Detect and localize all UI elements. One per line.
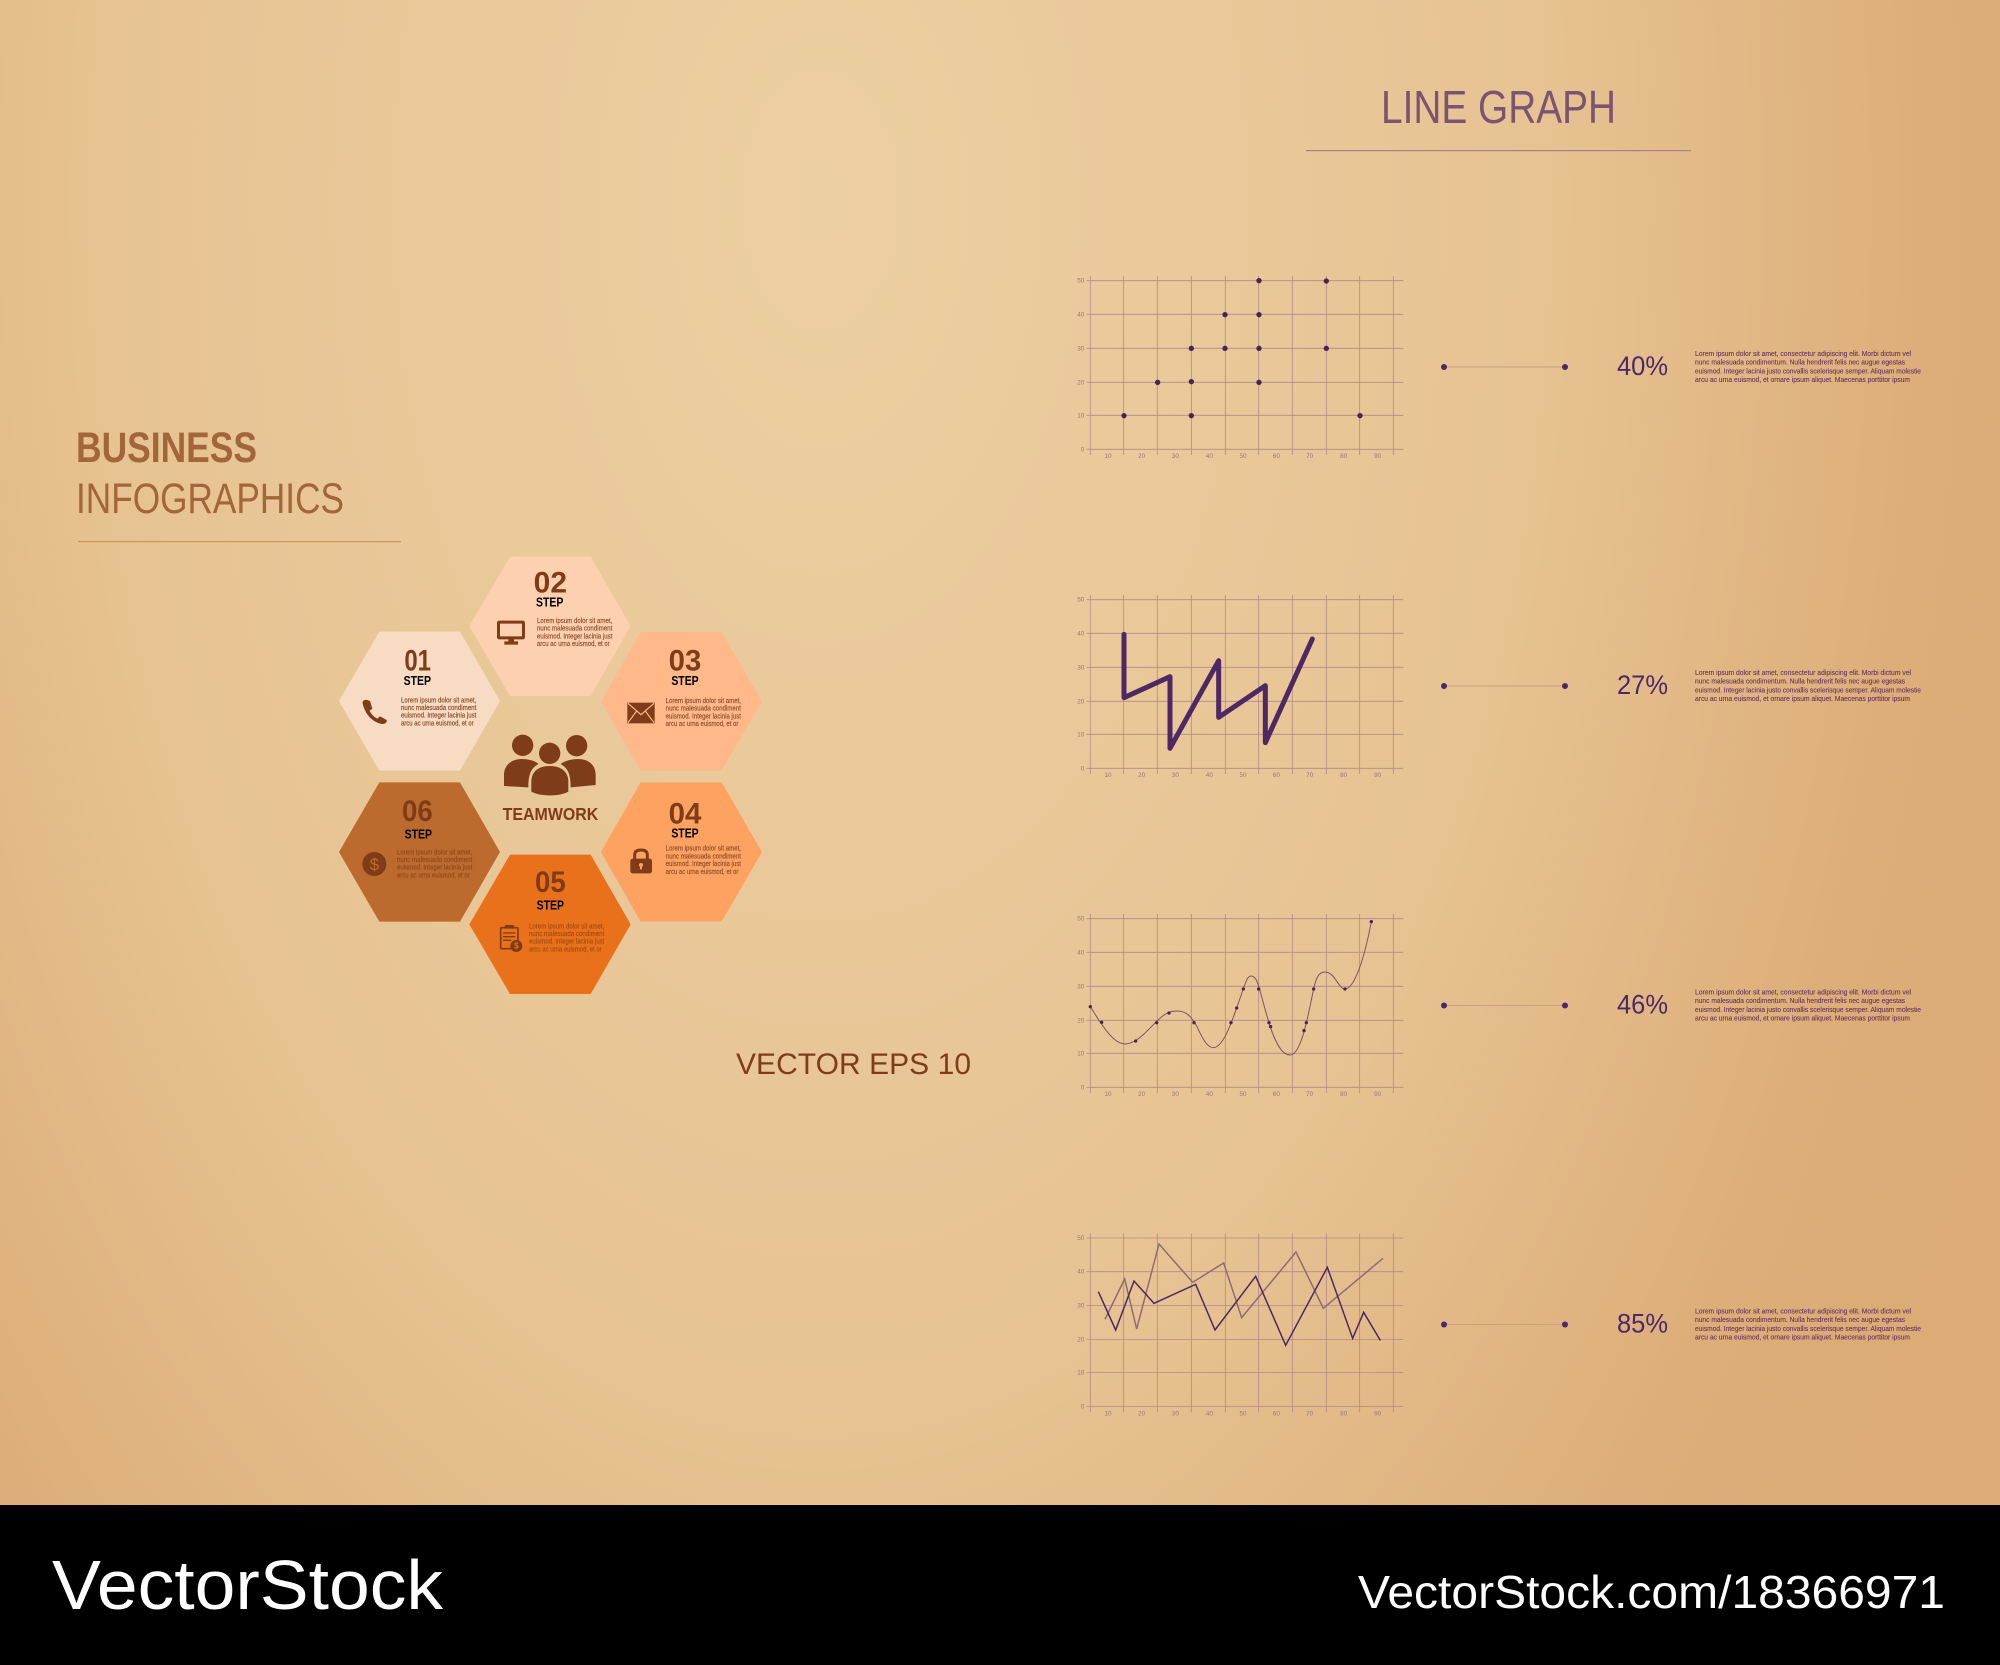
chart 3: smooth curve with points [1077,914,1403,1098]
chart 2: thick zigzag line: 60 [1273,772,1280,779]
chart 1: scatter dots: 50 [1077,278,1085,285]
row 2: connector, percent, text: 27% [1617,670,1668,700]
hexagon step 06: euismod. Integer lacinia just [397,865,472,872]
hexagon step 04: arcu ac urna euismod, et or [666,869,739,876]
hexagon step 02: Lorem ipsum dolor sit amet, [537,618,612,625]
row 3: connector, percent, text: nunc malesuada condimentum. Nulla hendrerit felis nec augue egestas [1695,996,1905,1005]
hexagon step 05: nunc malesuada condiment [529,931,604,938]
chart 1: scatter dots: 30 [1172,453,1179,460]
hexagon step 06: nunc malesuada condiment [397,857,472,864]
chart 4: two zigzag lines: 30 [1172,1410,1179,1417]
chart 4: two zigzag lines: 50 [1239,1410,1247,1417]
hexagon step 02: euismod. Integer lacinia just [537,633,612,640]
icon: padlock [630,850,652,873]
row 3: connector, percent, text: Lorem ipsum dolor sit amet, consectetur adipiscing elit. Morbi dictum vel [1695,988,1911,996]
chart 4: two zigzag lines: 10 [1077,1370,1085,1377]
chart 4: two zigzag lines: 0 [1081,1404,1085,1411]
chart 1: scatter dots: 10 [1077,412,1085,419]
hexagon step 01: euismod. Integer lacinia just [401,713,476,720]
hexagon step 03: euismod. Integer lacinia just [666,713,741,720]
chart 4: two zigzag lines [1077,1233,1403,1417]
heading: business infographics [76,424,401,542]
chart 2: thick zigzag line: 40 [1206,772,1213,779]
row 4: connector, percent, text: euismod. Integer lacinia justo convallis scelerisque semper. Aliquam molestie [1695,1324,1921,1333]
row 1: connector, percent, text [1441,349,1921,384]
chart 2: thick zigzag line: 50 [1239,772,1247,779]
heading: business infographics: BUSINESS [76,424,257,472]
chart 1: scatter dots: 30 [1077,345,1085,352]
hexagon step 05: euismod. Integer lacinia just [529,939,604,946]
chart 4: two zigzag lines: 10 [1104,1410,1112,1417]
row 4: connector, percent, text: 85% [1617,1308,1668,1338]
chart 4: two zigzag lines: 20 [1138,1410,1146,1417]
hexagon step 06: arcu ac urna euismod, et or [397,872,470,879]
chart 3: smooth curve with points: 30 [1077,983,1085,990]
chart 3: smooth curve with points: 30 [1172,1091,1179,1098]
hexagon step 05: 05 [535,866,566,899]
footer bar: VectorStock.com/18366971 [1358,1566,1945,1618]
chart 2: thick zigzag line: 70 [1306,772,1314,779]
row 1: connector, percent, text: 40% [1617,351,1668,381]
row 1: connector, percent, text: Lorem ipsum dolor sit amet, consectetur adipiscing elit. Morbi dictum vel [1695,349,1911,358]
hexagon step 05: arcu ac urna euismod, et or [529,947,602,954]
icon: clipboard with coin [501,925,522,952]
chart 3: smooth curve with points: 90 [1374,1091,1382,1098]
chart 1: scatter dots: 80 [1340,453,1348,460]
row 4: connector, percent, text: arcu ac urna euismod, et ornare ipsum aliquet. Maecenas porttitor ipsum [1695,1332,1910,1342]
row 4: connector, percent, text: nunc malesuada condimentum. Nulla hendrerit felis nec augue egestas [1695,1315,1905,1324]
hexagon step 05: STEP [537,898,564,913]
chart 4: two zigzag lines: 20 [1077,1337,1085,1344]
row 3: connector, percent, text [1441,988,1921,1022]
hexagon step 06 [339,782,500,922]
row 2: connector, percent, text: Lorem ipsum dolor sit amet, consectetur adipiscing elit. Morbi dictum vel [1695,668,1911,677]
chart 3: smooth curve with points: 10 [1104,1091,1112,1098]
chart 2: thick zigzag line [1077,595,1403,779]
chart 4: two zigzag lines: 40 [1206,1410,1213,1417]
hexagon step 03: nunc malesuada condiment [666,706,741,713]
chart 2: thick zigzag line: 30 [1077,664,1085,671]
chart 3: smooth curve with points: 80 [1340,1091,1348,1098]
row 2: connector, percent, text: arcu ac urna euismod, et ornare ipsum aliquet. Maecenas porttitor ipsum [1695,694,1910,703]
hexagon step 04: nunc malesuada condiment [666,853,741,860]
chart 4: two zigzag lines: 30 [1077,1303,1085,1310]
chart 2: thick zigzag line: 20 [1138,772,1146,779]
hexagon step 04: 04 [669,797,702,830]
chart 1: scatter dots: 70 [1306,453,1314,460]
hexagon step 01: arcu ac urna euismod, et or [401,720,474,727]
chart 4: two zigzag lines: 60 [1273,1410,1280,1417]
row 1: connector, percent, text: arcu ac urna euismod, et ornare ipsum aliquet. Maecenas porttitor ipsum [1695,375,1910,384]
chart 3: smooth curve with points: 60 [1273,1091,1280,1098]
row 1: connector, percent, text: euismod. Integer lacinia justo convallis scelerisque semper. Aliquam molestie [1695,366,1921,375]
row 2: connector, percent, text [1441,668,1921,703]
icon: clipboard with coin: $ [514,942,519,951]
row 4: connector, percent, text [1441,1306,1921,1342]
hexagon step 02: arcu ac urna euismod, et or [537,641,610,648]
icon: phone [363,700,387,724]
chart 1: scatter dots: 90 [1374,453,1382,460]
hexagon step 01: 01 [404,645,431,678]
chart 3: smooth curve with points: 50 [1239,1091,1247,1098]
icon: monitor [497,621,525,645]
chart 2: thick zigzag line: 80 [1340,772,1348,779]
chart 2: thick zigzag line: 90 [1374,772,1382,779]
chart 3: smooth curve with points: 40 [1206,1091,1213,1098]
row 4: connector, percent, text: Lorem ipsum dolor sit amet, consectetur adipiscing elit. Morbi dictum vel [1695,1306,1911,1316]
heading: line graph: LINE GRAPH [1381,81,1616,133]
row 2: connector, percent, text: nunc malesuada condimentum. Nulla hendrerit felis nec augue egestas [1695,677,1905,686]
hexagon step 06: 06 [402,795,433,828]
chart 1: scatter dots: 50 [1239,453,1247,460]
chart 4: two zigzag lines: 40 [1077,1269,1085,1276]
chart 3: smooth curve with points: 10 [1077,1050,1085,1057]
chart 2: thick zigzag line: 20 [1077,698,1085,705]
heading: business infographics: INFOGRAPHICS [76,475,344,523]
icon: envelope [627,703,655,723]
icon: dollar coin [362,852,386,876]
chart 1: scatter dots: 20 [1138,453,1146,460]
teamwork hexagon diagram [339,557,762,994]
label: teamwork: TEAMWORK [503,804,599,824]
chart 1: scatter dots: 20 [1077,379,1085,386]
hexagon step 03: arcu ac urna euismod, et or [666,721,739,728]
hexagon step 04: Lorem ipsum dolor sit amet, [666,846,741,853]
hexagon step 02: 02 [534,566,567,599]
hexagon step 03: 03 [669,645,701,678]
chart 3: smooth curve with points: 0 [1081,1084,1085,1091]
chart 1: scatter dots: 0 [1081,446,1085,453]
hexagon step 01: nunc malesuada condiment [401,705,476,712]
hexagon step 02 [469,557,631,696]
chart 3: smooth curve with points: 70 [1306,1091,1314,1098]
hexagon step 01: STEP [404,673,431,688]
hexagon step 03: STEP [671,673,699,688]
chart 3: smooth curve with points: 20 [1077,1017,1085,1024]
chart 2: thick zigzag line: 10 [1104,772,1112,779]
hexagon step 04: STEP [671,826,699,841]
chart 3: smooth curve with points: 50 [1077,916,1085,923]
hexagon step 04: euismod. Integer lacinia just [666,861,741,868]
chart 2: thick zigzag line: 10 [1077,731,1085,738]
chart 1: scatter dots: 10 [1104,453,1112,460]
hexagon step 03: Lorem ipsum dolor sit amet, [666,698,741,705]
hexagon step 02: STEP [536,595,563,610]
row 3: connector, percent, text: 46% [1617,990,1668,1020]
row 1: connector, percent, text: nunc malesuada condimentum. Nulla hendrerit felis nec augue egestas [1695,358,1905,367]
footer bar: VectorStock [52,1546,444,1624]
chart 1: scatter dots [1077,276,1403,460]
chart 2: thick zigzag line: 30 [1172,772,1179,779]
chart 2: thick zigzag line: 50 [1077,597,1085,604]
chart 4: two zigzag lines: 90 [1374,1410,1382,1417]
hexagon step 06: Lorem ipsum dolor sit amet, [397,849,472,856]
chart 2: thick zigzag line: 40 [1077,630,1085,637]
chart 4: two zigzag lines: 50 [1077,1235,1085,1242]
hexagon step 06: STEP [405,826,432,841]
chart 3: smooth curve with points: 40 [1077,949,1085,956]
icon: dollar coin: $ [370,855,379,874]
footer bar [0,1505,2000,1665]
chart 2: thick zigzag line: 0 [1081,765,1085,772]
chart 4: two zigzag lines: 80 [1340,1410,1348,1417]
hexagon step 03 [601,632,762,771]
hexagon step 01 [339,632,500,771]
hexagon step 02: nunc malesuada condiment [537,626,612,633]
chart 4: two zigzag lines: 70 [1306,1410,1314,1417]
hexagon step 01: Lorem ipsum dolor sit amet, [401,697,476,704]
row 3: connector, percent, text: euismod. Integer lacinia justo convallis scelerisque semper. Aliquam molestie [1695,1005,1921,1014]
row 3: connector, percent, text: arcu ac urna euismod, et ornare ipsum aliquet. Maecenas porttitor ipsum [1695,1014,1910,1022]
hexagon step 05 [469,855,631,994]
chart 3: smooth curve with points: 20 [1138,1091,1146,1098]
icon: team of people [504,735,596,795]
chart 1: scatter dots: 40 [1206,453,1213,460]
chart 1: scatter dots: 40 [1077,311,1085,318]
hexagon step 04 [601,782,762,922]
row 2: connector, percent, text: euismod. Integer lacinia justo convallis scelerisque semper. Aliquam molestie [1695,685,1921,694]
hexagon step 05: Lorem ipsum dolor sit amet, [529,923,604,930]
label: vector eps 10: VECTOR EPS 10 [736,1048,971,1081]
chart 1: scatter dots: 60 [1273,453,1280,460]
